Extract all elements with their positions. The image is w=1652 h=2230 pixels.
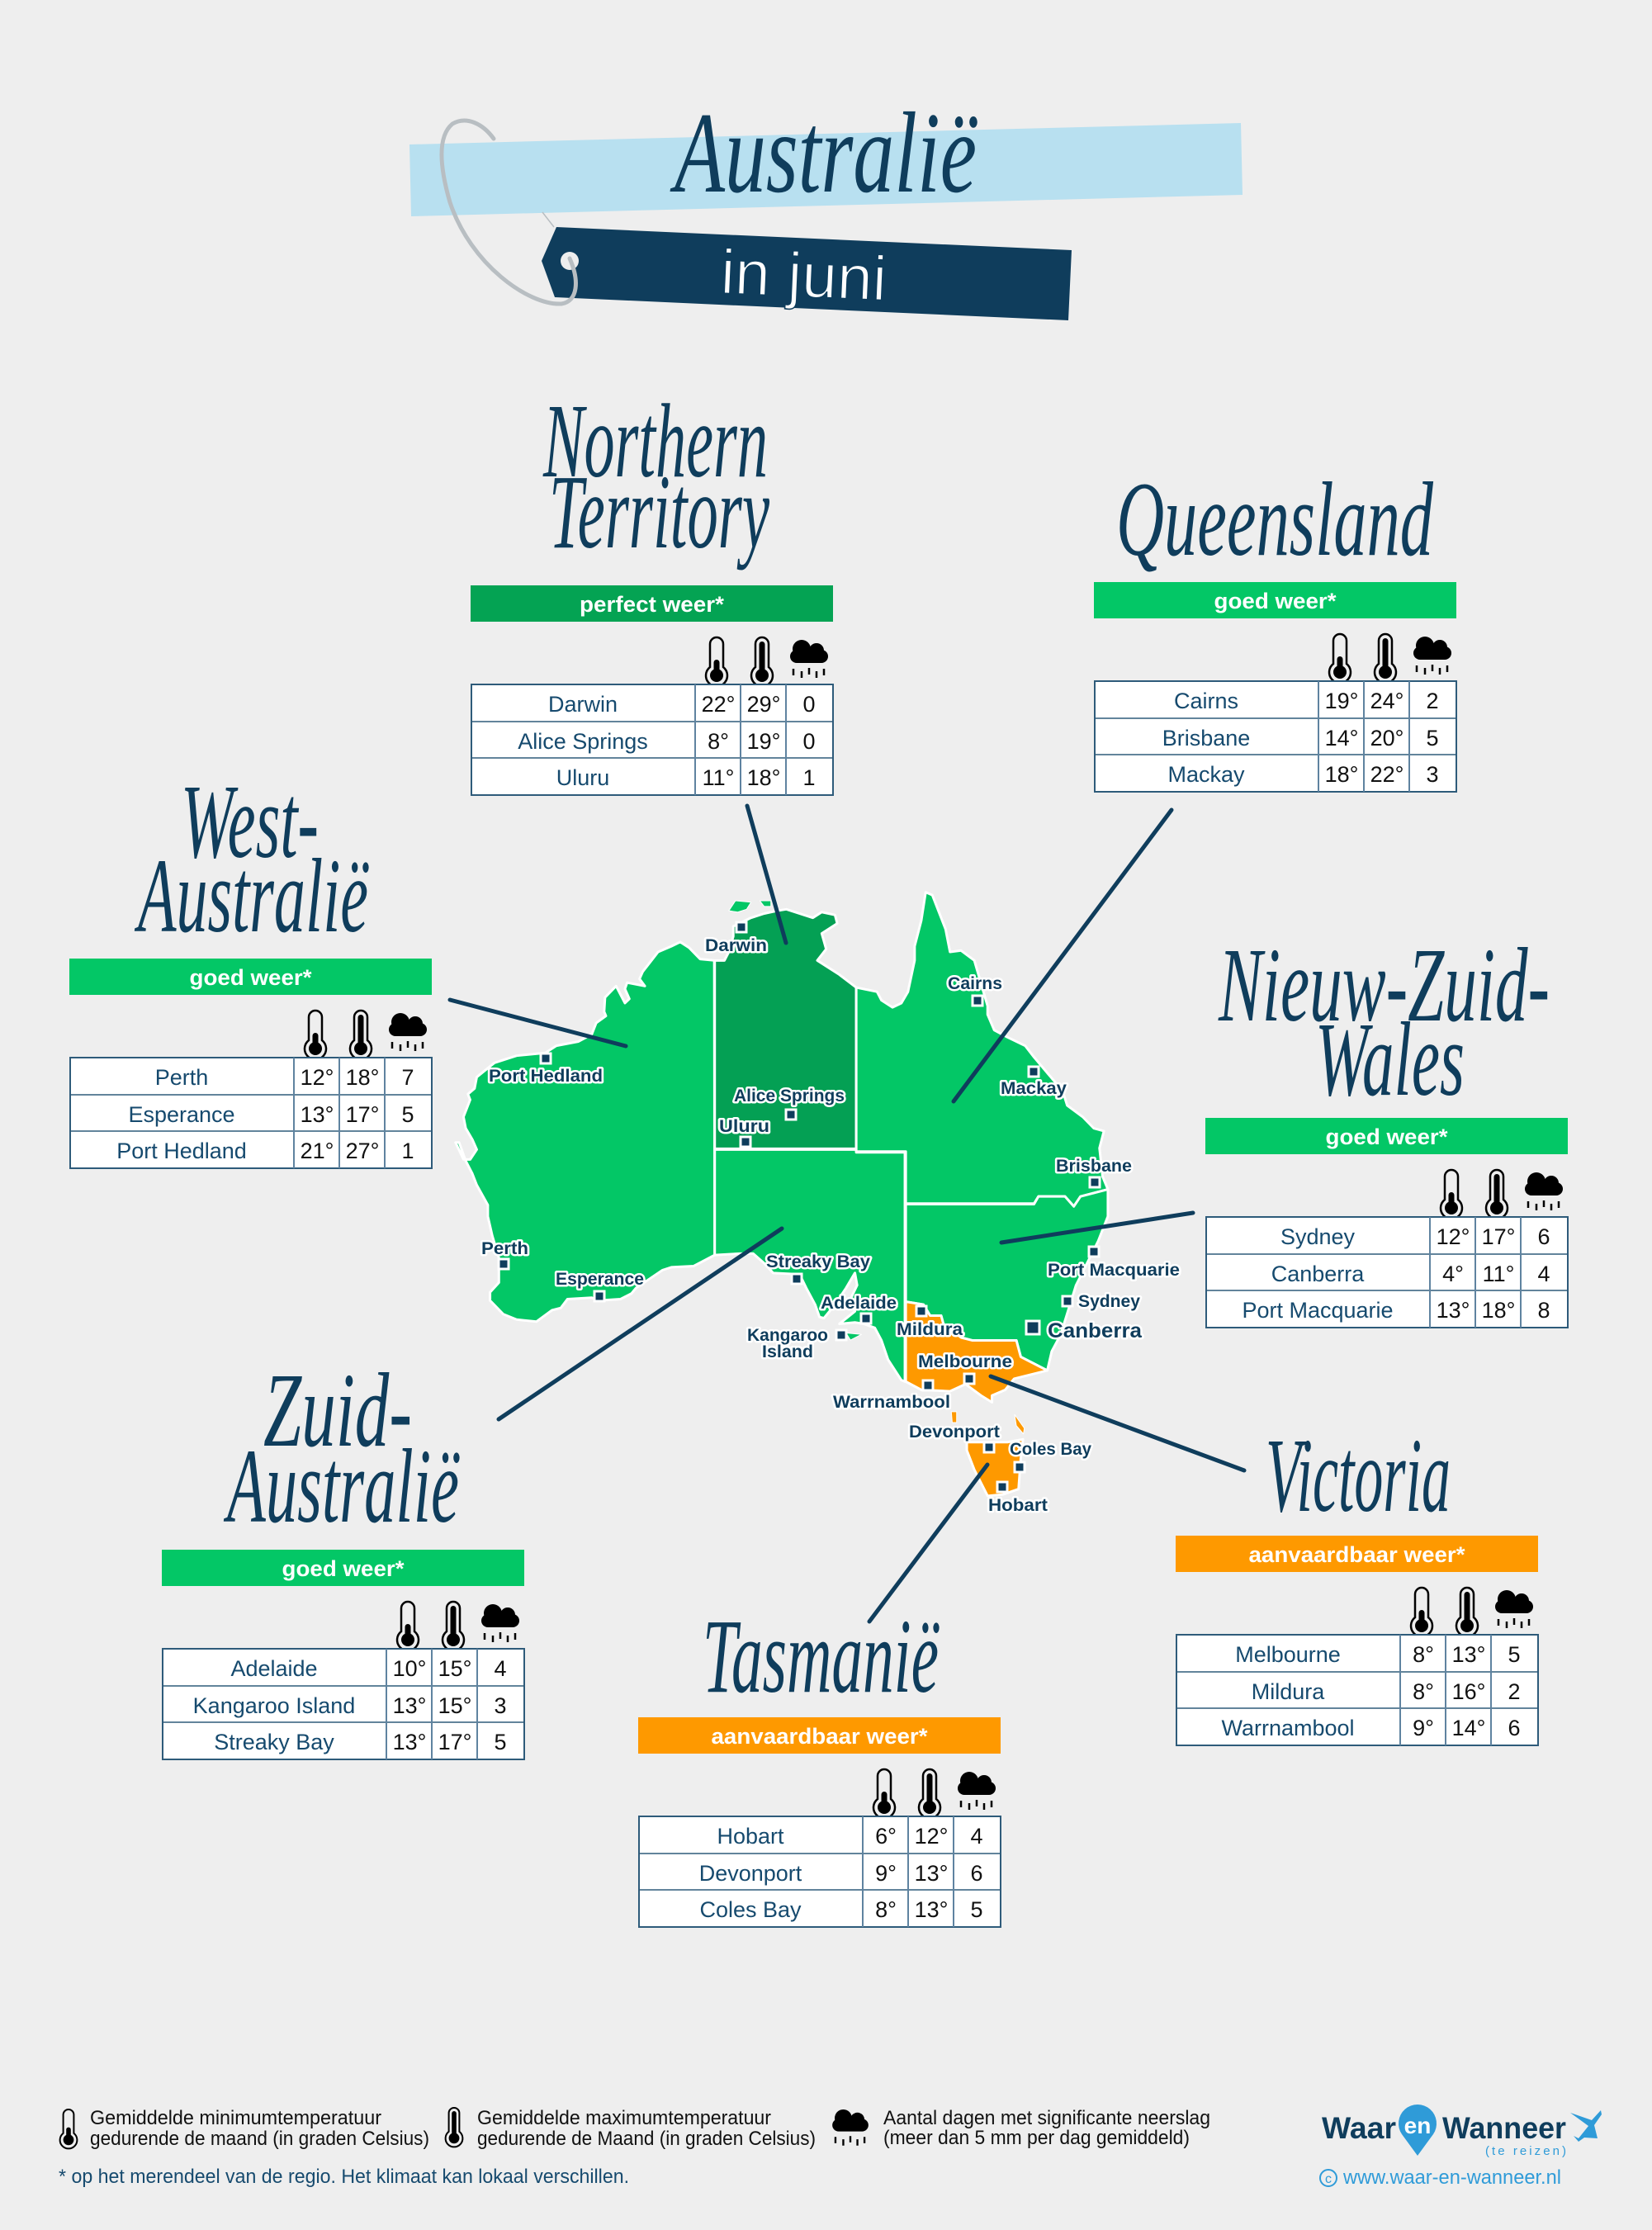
climate table: 11° — [1483, 1262, 1514, 1286]
city labels — [481, 936, 1180, 1515]
climate table: Perth — [155, 1065, 208, 1090]
climate table: 20° — [1370, 726, 1403, 750]
climate table: 22° — [1370, 762, 1403, 787]
climate table: Adelaide — [230, 1656, 318, 1681]
climate table: 2 — [1426, 689, 1439, 713]
region: Nieuw-Zuid-Wales — [906, 1190, 1108, 1371]
panel: Queensland — [1094, 461, 1456, 792]
climate table: 3 — [494, 1693, 507, 1718]
copyright symbol — [1320, 2170, 1337, 2186]
climate table: 0 — [802, 729, 816, 754]
climate table: 19° — [1325, 689, 1358, 713]
icon: maximum temperature — [446, 2108, 462, 2147]
header: title banner — [409, 89, 1243, 320]
climate table — [639, 1816, 1001, 1927]
footnote: * op het merendeel van de regio. Het klimaat kan lokaal verschillen. — [59, 2166, 629, 2188]
icons — [1411, 1588, 1533, 1636]
region: Tasmanië — [967, 1439, 1023, 1496]
rating bar: goed weer* — [1214, 589, 1337, 613]
map regions — [456, 892, 1108, 1496]
rating bar — [69, 959, 432, 995]
rating bar — [1094, 582, 1456, 618]
city labels: Mildura — [897, 1320, 963, 1339]
heading: Victoria — [1266, 1417, 1451, 1534]
climate table: 8 — [1537, 1298, 1550, 1323]
climate table: 19° — [747, 729, 780, 754]
city labels: Hobart — [988, 1496, 1048, 1515]
climate table: 13° — [301, 1102, 334, 1127]
climate table: 13° — [393, 1693, 426, 1718]
climate table: Mildura — [1252, 1679, 1325, 1704]
tagline: (te reizen) — [1485, 2144, 1566, 2158]
climate table: 17° — [346, 1102, 379, 1127]
island: King — [951, 1412, 957, 1423]
rating bar — [471, 585, 833, 622]
heading: Australië — [224, 1427, 460, 1545]
legend text: maximum: gedurende de Maand (in graden Celsius) — [477, 2128, 816, 2150]
climate table: 24° — [1370, 689, 1403, 713]
legend text: maximum: Gemiddelde maximumtemperatuur — [477, 2107, 771, 2129]
region: West-Australië — [456, 942, 715, 1322]
climate table: Esperance — [128, 1102, 235, 1127]
heading: Wales — [1315, 1001, 1465, 1118]
climate table — [1206, 1217, 1568, 1328]
climate table: Streaky Bay — [214, 1730, 334, 1754]
climate table: 13° — [915, 1861, 948, 1886]
city labels: Darwin — [705, 936, 767, 955]
region: Victoria — [906, 1302, 1048, 1403]
subtitle: in juni — [719, 237, 888, 315]
island: Flinders — [1015, 1414, 1025, 1434]
legend text: minimum: Gemiddelde minimumtemperatuur — [90, 2107, 381, 2129]
climate table: 5 — [1508, 1642, 1521, 1667]
climate table: 5 — [494, 1730, 507, 1754]
city labels: Port Macquarie — [1048, 1261, 1180, 1280]
climate table: Brisbane — [1162, 726, 1250, 750]
climate table: 22° — [702, 692, 735, 717]
city labels: Coles Bay — [1010, 1440, 1091, 1459]
leader lines — [450, 806, 1244, 1622]
rating bar: perfect weer* — [580, 592, 724, 617]
climate table: 15° — [438, 1693, 471, 1718]
climate table: 21° — [301, 1139, 334, 1163]
island: Tiwi — [729, 901, 751, 912]
climate table: 7 — [401, 1065, 414, 1090]
climate table: 6 — [1537, 1224, 1550, 1249]
climate table: 4 — [1537, 1262, 1550, 1286]
climate table: 13° — [1437, 1298, 1470, 1323]
city labels: Canberra — [1048, 1319, 1143, 1342]
climate table: 5 — [1426, 726, 1439, 750]
city labels: Mackay — [1001, 1079, 1067, 1098]
heading: Queensland — [1116, 461, 1434, 578]
panel: West-Australië — [69, 763, 432, 1168]
icons — [706, 637, 828, 686]
climate table: 6 — [1508, 1716, 1521, 1740]
climate table — [70, 1058, 432, 1168]
climate table: Kangaroo Island — [193, 1693, 355, 1718]
climate table: 18° — [1325, 762, 1358, 787]
rating bar: goed weer* — [190, 965, 312, 990]
icons — [1329, 634, 1451, 683]
climate table: Hobart — [717, 1824, 784, 1849]
region: Zuid-Australië — [715, 1149, 905, 1381]
logo: Waar en Wanneer — [1320, 2105, 1602, 2189]
climate table: 4 — [494, 1656, 507, 1681]
tag hole — [561, 252, 579, 270]
city labels: Alice Springs — [734, 1087, 845, 1106]
city labels: Sydney — [1078, 1292, 1140, 1311]
city labels: Kangaroo — [747, 1326, 828, 1345]
climate table — [163, 1649, 524, 1759]
climate table: Melbourne — [1235, 1642, 1341, 1667]
icon: rain cloud — [832, 2109, 869, 2146]
climate table: 4° — [1442, 1262, 1464, 1286]
icon: plane — [1570, 2110, 1602, 2142]
legend text: minimum: gedurende de maand (in graden Celsius) — [90, 2128, 429, 2150]
climate table: Sydney — [1280, 1224, 1356, 1249]
legend text: rain: Aantal dagen met significante neerslag — [883, 2107, 1210, 2129]
legend text: rain — [883, 2107, 1210, 2149]
climate table: 18° — [1482, 1298, 1515, 1323]
heading — [542, 382, 769, 571]
panel: Northern Territory — [471, 382, 833, 795]
climate table — [471, 684, 833, 795]
panel: Tasmanië — [638, 1598, 1001, 1927]
panel: Nieuw-Zuid-Wales — [1205, 926, 1568, 1328]
climate table: 1 — [802, 765, 816, 790]
heading: Territory — [549, 453, 769, 571]
rating bar: aanvaardbaar weer* — [712, 1724, 928, 1749]
climate table: 12° — [1437, 1224, 1470, 1249]
climate table: 5 — [401, 1102, 414, 1127]
city labels: Streaky Bay — [766, 1252, 870, 1271]
island: Melville — [760, 901, 771, 907]
location pin — [1399, 2105, 1437, 2156]
climate table: 10° — [393, 1656, 426, 1681]
city labels: Cairns — [948, 974, 1002, 993]
city labels: Island — [762, 1342, 813, 1361]
heading — [1218, 926, 1550, 1118]
climate table: 12° — [915, 1824, 948, 1849]
icons — [1441, 1170, 1563, 1219]
climate table: 15° — [438, 1656, 471, 1681]
climate table: 14° — [1452, 1716, 1485, 1740]
climate table: 12° — [301, 1065, 334, 1090]
climate table: 9° — [875, 1861, 897, 1886]
tag loop — [442, 121, 575, 304]
rating bar — [162, 1550, 524, 1586]
climate table: 6° — [875, 1824, 897, 1849]
climate table: Devonport — [699, 1861, 802, 1886]
panel: Victoria — [1176, 1417, 1538, 1745]
icons — [873, 1769, 996, 1818]
climate table: Mackay — [1167, 762, 1245, 787]
thin tag string — [542, 212, 554, 227]
heading: Zuid- — [263, 1352, 412, 1469]
climate table — [1176, 1635, 1538, 1745]
copyright symbol: c — [1325, 2172, 1332, 2186]
climate table: 29° — [747, 692, 780, 717]
climate table: Coles Bay — [699, 1897, 802, 1922]
climate table: 11° — [703, 765, 734, 790]
climate table: Uluru — [556, 765, 609, 790]
rating bar — [638, 1717, 1001, 1754]
city labels: Melbourne — [918, 1352, 1012, 1371]
icons — [305, 1011, 427, 1059]
climate table: Alice Springs — [518, 729, 648, 754]
climate table: Cairns — [1174, 689, 1238, 713]
region: Queensland — [856, 892, 1108, 1206]
climate table: 17° — [438, 1730, 471, 1754]
climate table: 5 — [970, 1897, 983, 1922]
city labels: Port Hedland — [489, 1067, 603, 1086]
climate table: 6 — [970, 1861, 983, 1886]
light blue ribbon — [409, 123, 1243, 216]
region: Northern Territory — [715, 909, 856, 1148]
city labels: Devonport — [909, 1423, 1000, 1442]
icons — [397, 1602, 519, 1650]
city markers — [499, 922, 1100, 1492]
title: Australië — [670, 89, 977, 217]
climate table: Port Macquarie — [1242, 1298, 1394, 1323]
climate table: 14° — [1325, 726, 1358, 750]
rating bar: goed weer* — [1326, 1124, 1448, 1149]
rating bar — [1205, 1118, 1568, 1154]
climate table: 9° — [1413, 1716, 1434, 1740]
city labels: Brisbane — [1056, 1157, 1132, 1176]
rating bar — [1176, 1536, 1538, 1572]
climate table — [1095, 681, 1456, 792]
panel: Zuid-Australië — [162, 1352, 524, 1759]
heading: Tasmanië — [703, 1598, 940, 1715]
climate table: 8° — [875, 1897, 897, 1922]
heading — [135, 763, 369, 954]
climate table: Darwin — [548, 692, 618, 717]
climate table: 4 — [970, 1824, 983, 1849]
island: Kangaroo — [846, 1333, 862, 1340]
climate table: 18° — [346, 1065, 379, 1090]
climate table: 8° — [1413, 1642, 1434, 1667]
city labels: Esperance — [556, 1270, 644, 1289]
climate table: 8° — [1413, 1679, 1434, 1704]
climate table: Warrnambool — [1221, 1716, 1355, 1740]
heading — [224, 1352, 460, 1545]
city labels: Uluru — [719, 1117, 769, 1136]
legend text: minimum — [90, 2107, 429, 2150]
city labels: Adelaide — [821, 1294, 897, 1313]
city labels: Perth — [481, 1239, 528, 1258]
wordmark left: Waar — [1322, 2111, 1396, 2145]
climate table: 2 — [1508, 1679, 1521, 1704]
climate table: 18° — [747, 765, 780, 790]
city labels: Warrnambool — [833, 1393, 950, 1412]
heading: West- — [181, 763, 319, 880]
climate table: 16° — [1452, 1679, 1485, 1704]
website: www.waar-en-wanneer.nl — [1342, 2166, 1561, 2189]
rating bar: goed weer* — [282, 1556, 405, 1581]
legend — [59, 2107, 1210, 2188]
map of Australia — [450, 806, 1244, 1622]
climate table: 13° — [1452, 1642, 1485, 1667]
pin text: en — [1404, 2113, 1431, 2138]
climate table: Canberra — [1271, 1262, 1365, 1286]
dark tag — [542, 227, 1072, 320]
climate table: 1 — [401, 1139, 414, 1163]
climate table: Port Hedland — [116, 1139, 247, 1163]
climate table: 8° — [708, 729, 729, 754]
rating bar: aanvaardbaar weer* — [1248, 1542, 1465, 1567]
climate table: 3 — [1426, 762, 1439, 787]
legend text: maximum — [477, 2107, 816, 2150]
heading: Northern — [542, 382, 768, 500]
wordmark right: Wanneer — [1442, 2111, 1566, 2145]
climate table: 13° — [393, 1730, 426, 1754]
heading: Australië — [135, 837, 369, 954]
climate table: 27° — [346, 1139, 379, 1163]
climate table: 17° — [1482, 1224, 1515, 1249]
icon: minimum temperature — [60, 2109, 77, 2148]
legend text: rain: (meer dan 5 mm per dag gemiddeld) — [883, 2127, 1190, 2149]
climate table: 13° — [915, 1897, 948, 1922]
climate table: 0 — [802, 692, 816, 717]
